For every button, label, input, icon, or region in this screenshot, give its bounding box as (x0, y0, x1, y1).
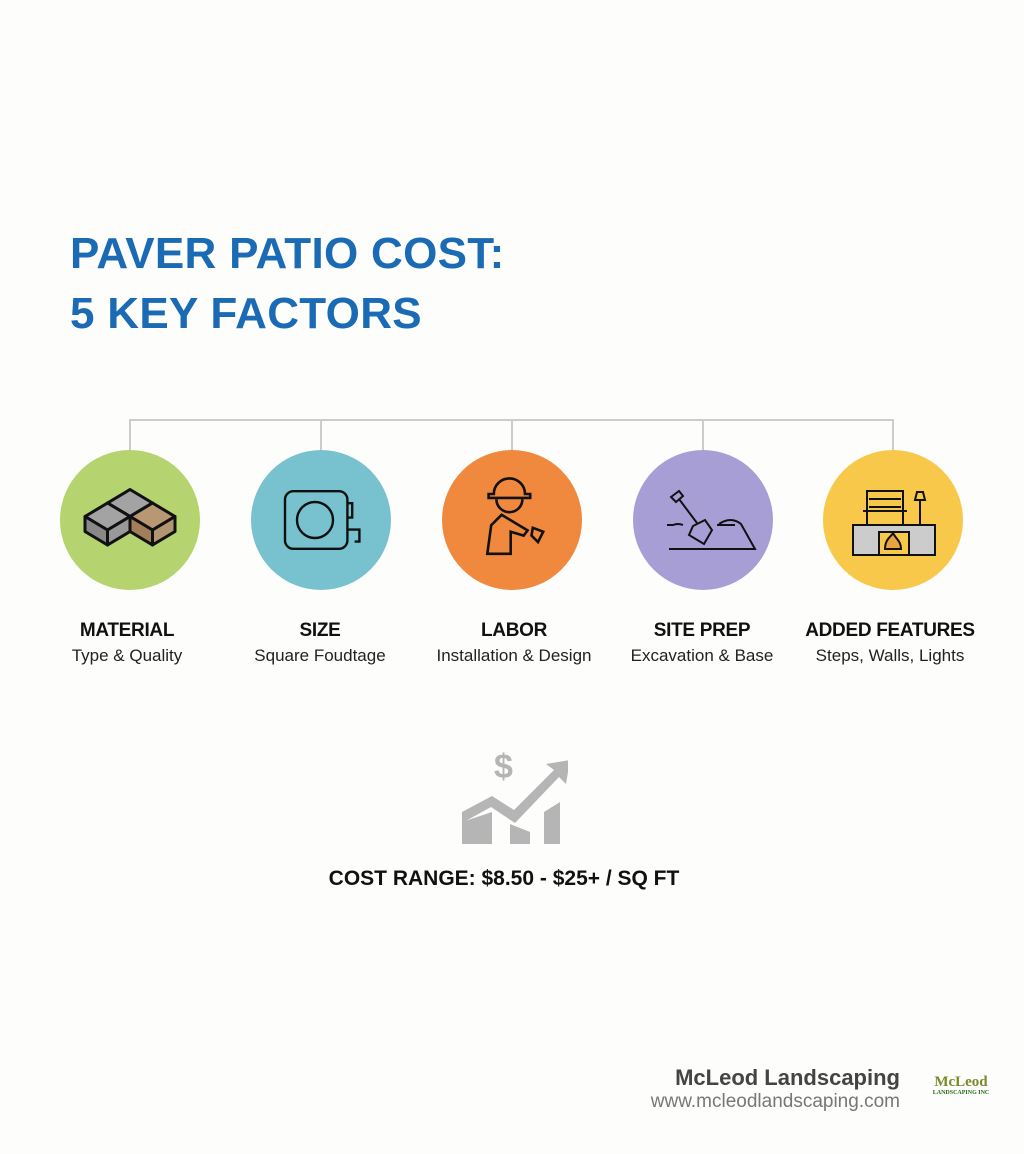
label: added features: Steps, Walls, Lights (816, 646, 964, 665)
footer brand: McLeod Landscaping (675, 1065, 900, 1090)
label: labor: LABOR (481, 620, 547, 641)
title: PAVER PATIO COST: (70, 229, 505, 278)
label: labor: Installation & Design (436, 646, 591, 665)
label: added features: ADDED FEATURES (805, 620, 975, 641)
label: material: Type & Quality (72, 646, 182, 665)
icon: cost chart (462, 748, 568, 844)
label: material (72, 620, 182, 665)
title (70, 229, 505, 338)
label: size (254, 620, 386, 665)
footer brand: www.mcleodlandscaping.com (651, 1091, 900, 1112)
label: material: MATERIAL (80, 620, 174, 641)
icon: cost chart: $ (494, 748, 513, 786)
logo: LANDSCAPING INC (933, 1090, 989, 1096)
icon: labor (442, 450, 582, 590)
icon: size (251, 450, 391, 590)
label: size: SIZE (299, 620, 341, 641)
label: size: Square Foudtage (254, 646, 386, 665)
icon: site prep (633, 450, 773, 590)
footer brand (650, 1065, 900, 1112)
label: site prep: SITE PREP (654, 620, 750, 641)
label: added features (805, 620, 975, 665)
connector lines (129, 419, 894, 450)
title: 5 KEY FACTORS (70, 289, 422, 338)
icon: material (60, 450, 200, 590)
label: site prep (631, 620, 773, 665)
icon: added features (823, 450, 963, 590)
logo: McLeod (934, 1074, 988, 1090)
logo (932, 1074, 989, 1096)
label: site prep: Excavation & Base (631, 646, 773, 665)
label: labor (436, 620, 591, 665)
cost range: COST RANGE: $8.50 - $25+ / SQ FT (329, 867, 679, 890)
